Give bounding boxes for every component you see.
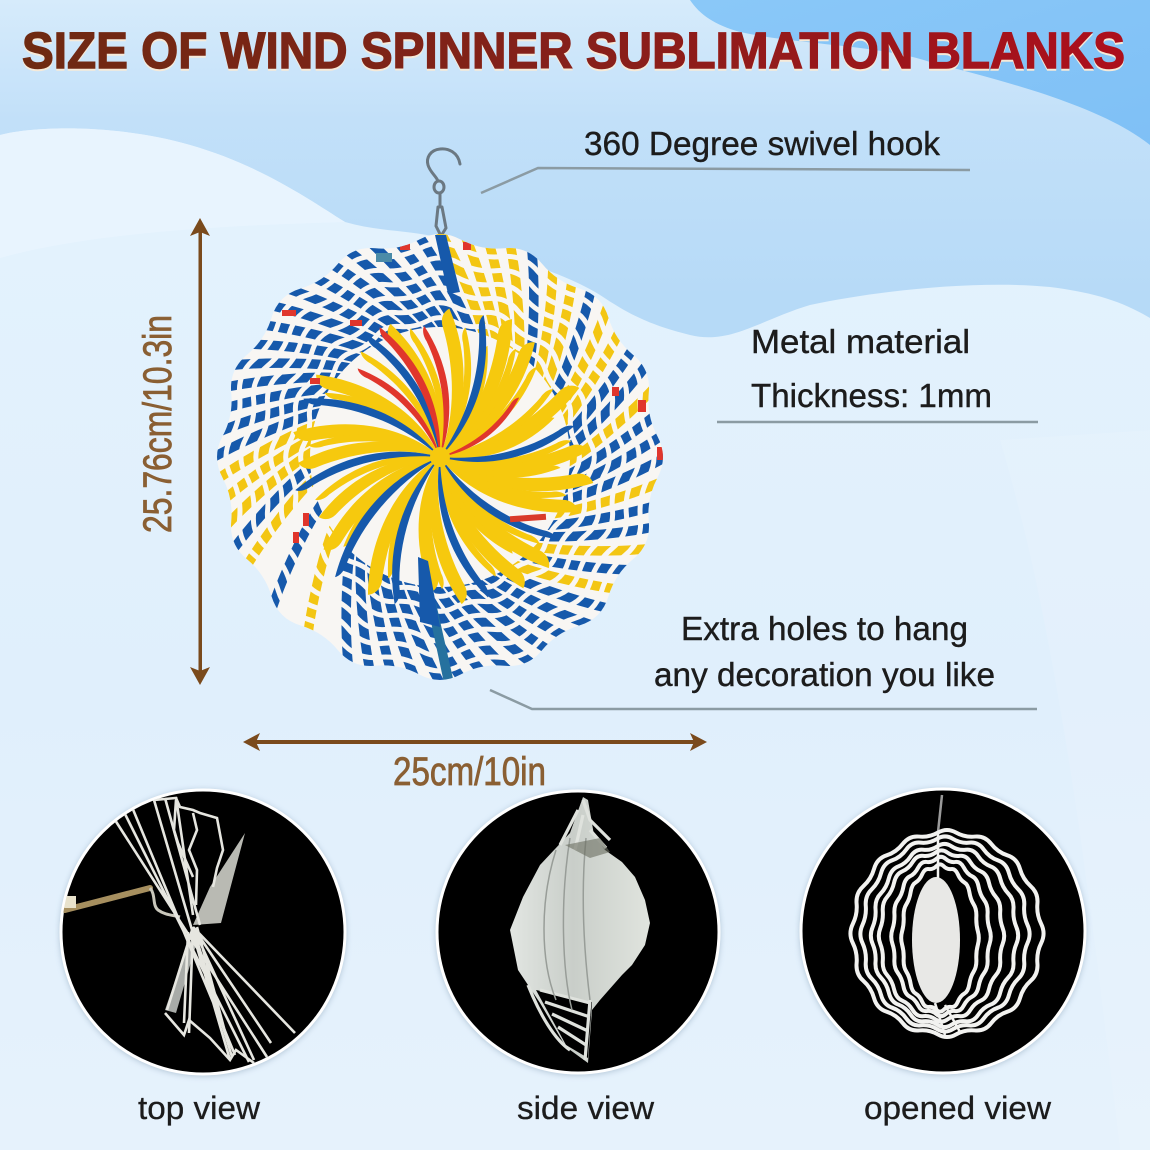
callout: extra holes: any decoration you like (654, 656, 995, 693)
side view: leaf shaped spinner (510, 797, 650, 1063)
wind spinner (217, 234, 663, 680)
panel: opened view photo (801, 789, 1085, 1073)
outer tile arms (217, 234, 663, 680)
callout: swivel hook (481, 125, 970, 193)
arrow: vertical height dimension (190, 218, 210, 685)
opened view: central plate (912, 877, 960, 1003)
panel: side view photo (437, 791, 719, 1073)
callout: extra holes (490, 610, 1037, 709)
top view: spinner strands and rod (62, 797, 295, 1063)
opened view: converging strands (935, 832, 960, 1035)
callout: metal material (717, 323, 1038, 422)
callout: swivel hook: 360 Degree swivel hook (584, 125, 940, 162)
label: side view: side view (517, 1090, 655, 1126)
yellow and blue spiral blades (293, 308, 594, 605)
callout: metal material: Thickness: 1mm (751, 377, 992, 414)
icon: swivel hook (428, 149, 460, 236)
arrow: horizontal width dimension (243, 733, 707, 751)
opened view: concentric wavy rings (850, 830, 1044, 1037)
wavy white rings slicing tiles (226, 243, 654, 671)
white inner disc behind blades (310, 327, 570, 587)
height label: 25.76cm/10.3in (136, 315, 180, 533)
label: top view: top view (138, 1090, 261, 1126)
label: opened view: opened view (864, 1090, 1052, 1126)
opened view: hanger (938, 795, 942, 832)
callout: extra holes: Extra holes to hang (681, 610, 968, 647)
width label: 25cm/10in (393, 750, 546, 794)
accent tiles (282, 235, 666, 683)
callout: metal material: Metal material (751, 323, 970, 360)
panel: top view photo (61, 790, 345, 1074)
